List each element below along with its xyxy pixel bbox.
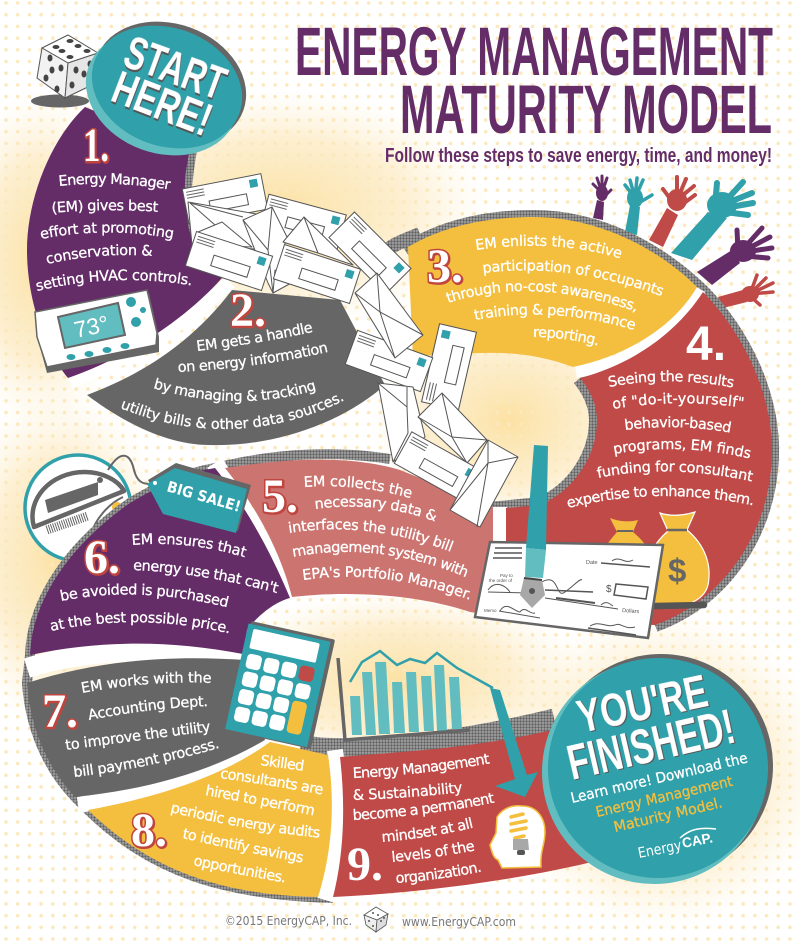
icon: utility meter with cord (25, 455, 150, 561)
step 6 number: 6. (84, 531, 120, 584)
icon: raised hands (593, 176, 773, 308)
icon: pen (520, 445, 548, 608)
step 5 text: necessary data & (315, 498, 436, 522)
step 6 text: energy use that can't (134, 562, 279, 594)
badge: start here (68, 1, 264, 176)
icon: thermostat (35, 290, 159, 373)
badge: start here: HERE! (105, 61, 219, 146)
step 8 text: hired to perform (206, 784, 314, 816)
step 1 text (36, 173, 191, 291)
panel: step 2 (87, 284, 384, 446)
step 4 number: 4. (686, 318, 726, 371)
logo: EnergyCAP: CAP. (681, 829, 714, 851)
step 7 text: bill payment process. (74, 742, 218, 777)
icon: small dice (364, 907, 388, 932)
footer (225, 907, 516, 932)
step 4 text: programs, EM finds (614, 439, 751, 458)
panel: step 6 (30, 468, 290, 655)
step 4 text: expertise to enhance them. (568, 484, 752, 508)
step 8 text: to identify savings (184, 828, 304, 864)
panel: step 8 (88, 742, 332, 897)
step 5 text: management system with (292, 544, 468, 577)
step 1 text: conservation & (46, 244, 152, 264)
panel: step 1 (27, 107, 222, 378)
step 2 text: on energy information (178, 344, 328, 372)
step 8 text: periodic energy audits (170, 804, 320, 838)
step 9 text: become a permanent (352, 791, 496, 824)
badge: you're finished: Energy Management (594, 774, 735, 821)
step 2 text: by managing & tracking (154, 378, 316, 404)
step 4 text: of "do-it-yourself" (613, 392, 744, 409)
step 4 text: behavior-based (624, 416, 732, 433)
icon: dice (31, 35, 98, 108)
step 5 text: interfaces the utility bill (288, 518, 454, 552)
step 4 text (568, 370, 754, 508)
panel: step 5 (225, 460, 493, 613)
icon: check with pen: Dollars (622, 608, 640, 615)
logo: EnergyCAP (637, 828, 716, 862)
icon: money bags: $ (668, 552, 686, 589)
step 1 number: 1. (83, 119, 109, 172)
step 7 text: Accounting Dept. (88, 696, 207, 720)
step 8 text: Skilled (260, 754, 304, 771)
step 3 text (446, 234, 664, 347)
panel: step 4 (506, 292, 772, 625)
step 2 number: 2. (230, 284, 266, 337)
icon: check with pen (475, 445, 663, 638)
bar chart with arrow (338, 651, 538, 797)
panel: step 3 (408, 217, 697, 367)
road gaps (27, 282, 700, 900)
step 9 text (354, 754, 495, 885)
step 9 text: levels of the (391, 839, 476, 866)
step 7 text: EM works with the (81, 671, 211, 693)
step 6 text (50, 533, 279, 634)
step 9 text: Energy Management (354, 754, 490, 780)
footer: www.EnergyCAP.com (402, 914, 516, 929)
icon: big sale tag: BIG SALE! (165, 478, 243, 516)
step 9 number: 9. (347, 838, 383, 891)
step 2 text (122, 323, 344, 430)
step 3 text: through no-cost awareness, (446, 282, 636, 312)
step 9 text: & Sustainability (353, 780, 464, 804)
step 3 text: EM enlists the active (476, 234, 622, 258)
icon: check with pen: the order of (489, 578, 513, 583)
step 6 text: at the best possible price. (50, 612, 228, 634)
panel: step 7 (27, 658, 265, 797)
step 3 text: participation of occupants (483, 259, 664, 296)
halftone road edges (27, 150, 772, 898)
step 2 text: EM gets a handle (197, 323, 312, 351)
step 1 text: (EM) gives best (52, 199, 158, 215)
icon: check with pen: Date (586, 560, 598, 566)
icon: check with pen: $ (606, 584, 612, 595)
icon: thermostat: 73° (72, 310, 111, 343)
step 7 text (65, 671, 218, 777)
icon: big sale tag (147, 463, 251, 533)
logo: EnergyCAP: Energy (637, 838, 683, 862)
step 4 text: funding for consultant (596, 460, 754, 482)
icon: money bags (600, 512, 709, 608)
icon: calculator (225, 621, 335, 749)
step 8 text: consultants are (221, 770, 323, 794)
badge: you're finished: Maturity Model. (612, 795, 724, 836)
step 9 text: mindset at all (381, 816, 475, 846)
step 5 text: EM collects the (304, 476, 412, 498)
icon: pile of envelopes (182, 174, 518, 527)
badge: start here: START (118, 26, 233, 110)
title (295, 13, 773, 148)
step 2 text: utility bills & other data sources. (122, 395, 344, 430)
badge: you're finished: Learn more! Download the (569, 751, 749, 807)
badge: you're finished (542, 654, 773, 884)
icon: check with pen: Memo (484, 608, 497, 613)
step 1 text: Energy Manager (59, 173, 171, 190)
panel: step 9 (333, 730, 588, 897)
step 6 text: be avoided is purchased (60, 583, 229, 608)
step 8 number: 8. (131, 804, 167, 857)
step 6 text: EM ensures that (132, 533, 247, 558)
icon: head with light bulb (490, 806, 545, 868)
step 9 text: organization. (395, 860, 483, 887)
step 1 text: setting HVAC controls. (36, 269, 191, 291)
badge: you're finished: YOU'RE (572, 664, 712, 743)
step 3 number: 3. (427, 240, 463, 293)
step 3 text: reporting. (534, 328, 598, 347)
step 7 number: 7. (42, 685, 78, 738)
step 5 text (288, 476, 470, 600)
step 5 text: EPA's Portfolio Manager. (302, 566, 470, 600)
step 4 text: Seeing the results (608, 370, 734, 388)
step 5 number: 5. (262, 470, 298, 523)
step 7 text: to improve the utility (65, 722, 210, 750)
footer: ©2015 EnergyCAP, Inc. (225, 913, 352, 928)
icon: check with pen: Pay to (500, 573, 513, 578)
step 3 text: training & performance (474, 304, 635, 330)
step 8 text: opportunities. (194, 858, 284, 882)
step 1 text: effort at promoting (40, 222, 174, 241)
step 8 text (170, 754, 323, 882)
